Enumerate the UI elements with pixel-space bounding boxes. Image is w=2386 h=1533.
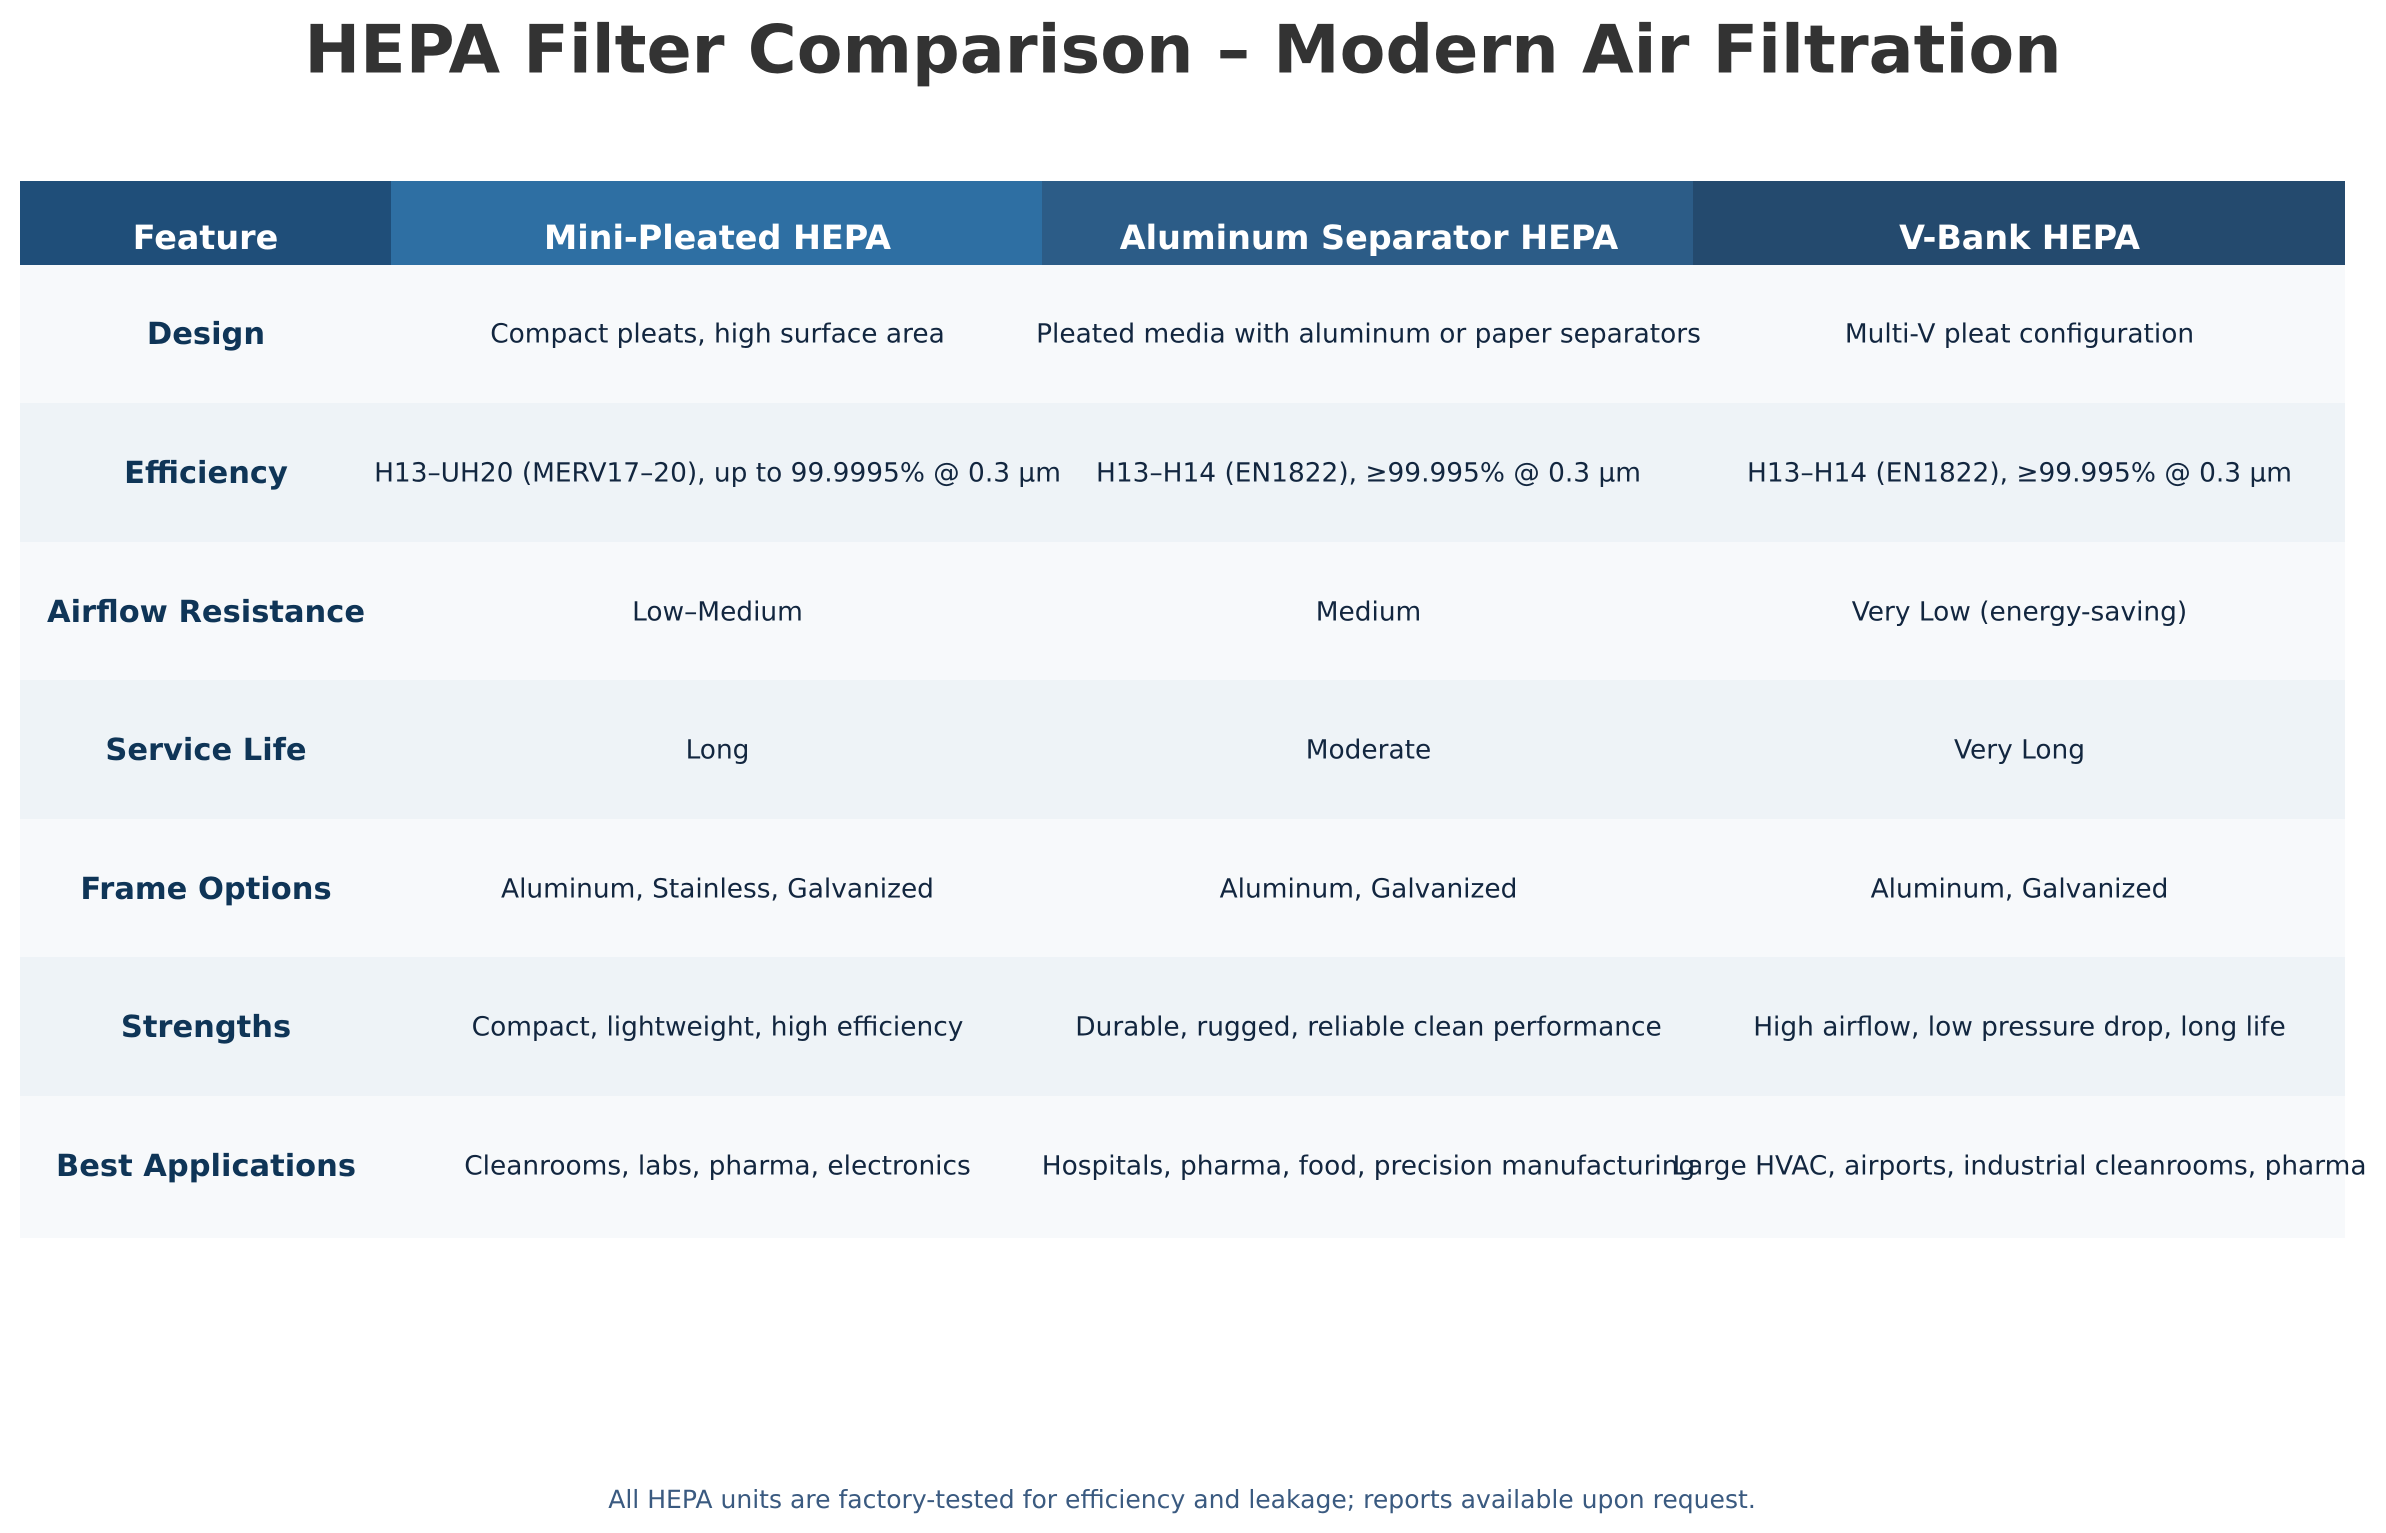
row: best applications: Large HVAC, airports, industrial cleanrooms, pharma	[1672, 1150, 2367, 1182]
row: strengths: Durable, rugged, reliable clean performance	[1075, 1012, 1662, 1042]
row: strengths: Strengths	[121, 1010, 291, 1045]
row: best applications: Hospitals, pharma, food, precision manufacturing	[1042, 1150, 1695, 1182]
row: service life	[20, 680, 2345, 819]
row: service life: Service Life	[105, 733, 307, 768]
row: service life: Long	[686, 734, 749, 766]
table header row: Aluminum Separator HEPA	[1120, 218, 1618, 257]
row: airflow resistance: Very Low (energy-saving)	[1852, 596, 2187, 628]
row: strengths	[20, 957, 2345, 1096]
row: efficiency: H13–H14 (EN1822), ≥99.995% @ 0.3 µm	[1747, 458, 2292, 488]
row: best applications: Best Applications	[56, 1149, 356, 1184]
row: strengths: High airflow, low pressure drop, long life	[1753, 1012, 2286, 1042]
footnote: All HEPA units are factory-tested for efficiency and leakage; reports available upon request.	[608, 1485, 1756, 1514]
row: design	[20, 265, 2345, 403]
row: design: Pleated media with aluminum or paper separators	[1036, 318, 1701, 350]
row: frame options: Aluminum, Galvanized	[1220, 874, 1517, 904]
row: frame options	[20, 819, 2345, 957]
row: efficiency: H13–H14 (EN1822), ≥99.995% @ 0.3 µm	[1096, 458, 1641, 488]
row: efficiency	[20, 403, 2345, 542]
row: design: Compact pleats, high surface area	[490, 318, 945, 350]
table header row	[20, 181, 2345, 265]
row: best applications	[20, 1096, 2367, 1238]
row: frame options: Aluminum, Stainless, Galvanized	[501, 874, 934, 904]
table header row: V-Bank HEPA	[1899, 218, 2140, 257]
table header row: Mini-Pleated HEPA	[544, 218, 891, 257]
row: efficiency: Efficiency	[124, 456, 288, 491]
row: strengths: Compact, lightweight, high efficiency	[472, 1012, 963, 1042]
row: best applications: Cleanrooms, labs, pharma, electronics	[464, 1150, 971, 1182]
title: HEPA Filter Comparison – Modern Air Filtration	[304, 10, 2062, 88]
table header row: Feature	[133, 218, 278, 257]
row: design: Multi-V pleat configuration	[1845, 318, 2194, 350]
row: airflow resistance: Low–Medium	[632, 596, 803, 628]
row: airflow resistance: Airflow Resistance	[47, 595, 365, 630]
row: airflow resistance	[20, 542, 2345, 680]
row: frame options: Frame Options	[80, 872, 332, 907]
row: service life: Moderate	[1306, 734, 1431, 766]
row: efficiency: H13–UH20 (MERV17–20), up to 99.9995% @ 0.3 µm	[374, 458, 1061, 488]
row: airflow resistance: Medium	[1316, 596, 1421, 628]
row: service life: Very Long	[1954, 734, 2085, 766]
row: design: Design	[147, 317, 265, 352]
comparison table	[20, 181, 2367, 1238]
row: frame options: Aluminum, Galvanized	[1871, 874, 2168, 904]
